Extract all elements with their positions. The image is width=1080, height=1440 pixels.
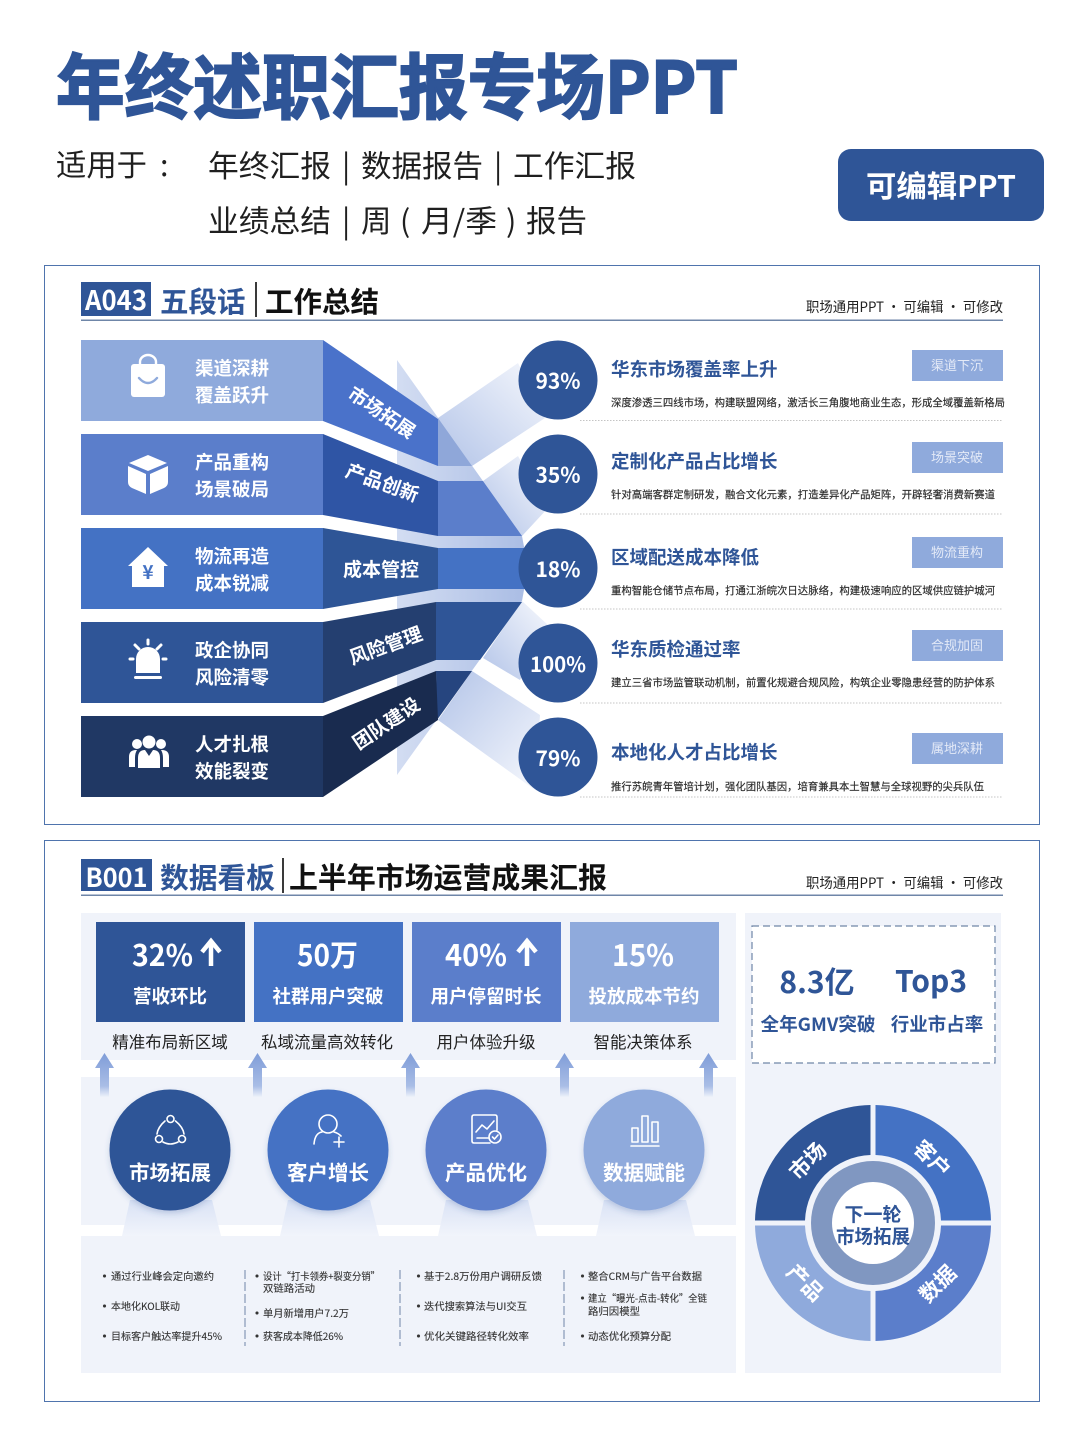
row 1: channel coverage: 市场拓展 [343, 379, 421, 444]
KPI row 2: 场景突破 [931, 447, 983, 466]
bullet list: product [417, 1268, 542, 1343]
subtitle: applicable scenarios: 年终汇报 [208, 142, 331, 186]
panel: B001 data dashboard [44, 840, 1040, 1402]
icon: bar chart [631, 1116, 659, 1146]
row 4: risk management [81, 602, 436, 703]
KPI row 1 [518, 340, 1005, 420]
subtitle: applicable scenarios: 月/季 [421, 197, 497, 241]
row 1: channel coverage: 渠道深耕 [195, 355, 269, 381]
bullet list: data: 路归因模型 [588, 1303, 640, 1318]
panel B heading [81, 855, 1003, 897]
row 2: product rebuild: 产品重构 [195, 449, 269, 475]
segment: customer [876, 1105, 991, 1220]
KPI row 3: 18% [535, 554, 581, 584]
bullet list: customer: 单月新增用户7.2万 [263, 1305, 349, 1320]
bullet list: product: 优化关键路径转化效率 [424, 1328, 529, 1343]
subtitle: applicable scenarios: 工作汇报 [513, 142, 636, 186]
background bands [81, 913, 1001, 1373]
circle: data empowerment [584, 1090, 704, 1210]
subtitle: applicable scenarios: | [494, 142, 502, 186]
metric card: community users [254, 922, 403, 1053]
segment: product: 产品 [780, 1257, 831, 1308]
row 2: product rebuild [81, 434, 438, 536]
subtitle: applicable scenarios: 报告 [526, 197, 587, 241]
icon: report with check [472, 1115, 501, 1143]
KPI row 5: 推行苏皖青年管培计划，强化团队基因，培育兼具本土智慧与全球视野的尖兵队伍 [611, 779, 984, 794]
row 2: product rebuild: 场景破局 [195, 476, 269, 502]
segment: market: 市场 [782, 1135, 833, 1186]
KPI row 5: 79% [535, 743, 581, 773]
row 5: talent: 效能裂变 [195, 758, 269, 784]
metric card: ad cost: 智能决策体系 [594, 1029, 692, 1053]
panel A heading: 五段话 [160, 280, 246, 321]
subtitle: applicable scenarios: | [342, 197, 350, 241]
bullet list: data [581, 1268, 707, 1343]
icon: house with yen: ¥ [142, 558, 154, 585]
row 3: logistics cost: 物流再造 [195, 543, 270, 569]
subtitle: applicable scenarios: 适用于 [56, 141, 147, 185]
icon: shopping bag [131, 355, 165, 397]
circle: product optimisation: 产品优化 [445, 1156, 527, 1186]
bullet list: market: 本地化KOL联动 [111, 1298, 180, 1313]
callout: annual totals: 行业市占率 [891, 1011, 983, 1037]
pedestal beams [122, 1200, 695, 1236]
callout: annual totals [752, 926, 995, 1063]
metric card: community users: 社群用户突破 [272, 983, 384, 1009]
bullet list: data: 建立“曝光-点击-转化”全链 [588, 1290, 707, 1305]
KPI row 4: 建立三省市场监管联动机制，前置化规避合规风险，构筑企业零隐患经营的防护体系 [611, 675, 995, 690]
panel B heading: 数据看板 [160, 856, 275, 897]
donut hub [811, 1161, 935, 1285]
dashed column dividers [245, 1270, 564, 1346]
subtitle: applicable scenarios: 周 [361, 197, 392, 241]
metric card: ad cost [570, 922, 719, 1053]
white separators between folds [323, 421, 397, 716]
KPI row 2: 定制化产品占比增长 [611, 448, 778, 474]
donut hub: 市场拓展 [836, 1222, 910, 1249]
KPI row 5: 本地化人才占比增长 [611, 739, 778, 765]
bullet list: market [103, 1268, 222, 1343]
subtitle: applicable scenarios [56, 141, 636, 241]
circle: customer growth [268, 1090, 388, 1210]
icon: alarm light [130, 640, 166, 679]
row 1: channel coverage [81, 340, 438, 466]
panel A heading: 工作总结 [265, 280, 379, 321]
subtitle: applicable scenarios: | [342, 142, 350, 186]
KPI row 4: 合规加固 [931, 635, 983, 654]
segment: product [755, 1226, 870, 1341]
icon: share loop [156, 1116, 186, 1144]
panel B heading: 职场通用PPT · 可编辑 · 可修改 [806, 873, 1003, 893]
subtitle: applicable scenarios: : [160, 141, 168, 185]
KPI row 3 [518, 528, 1003, 609]
funnel graphic [81, 340, 548, 797]
KPI row 4: 100% [530, 649, 586, 679]
metric card: dwell time: 用户体验升级 [436, 1029, 536, 1053]
metric card: revenue: 精准布局新区域 [112, 1029, 228, 1053]
callout: annual totals: Top3 [895, 957, 967, 1001]
subtitle: applicable scenarios: 业绩总结 [208, 197, 331, 241]
panel A heading [81, 279, 1003, 321]
metric card: revenue: 营收环比 [133, 983, 207, 1009]
icon: house with yen [128, 547, 168, 587]
bullet list: data: 整合CRM与广告平台数据 [588, 1268, 702, 1283]
KPI row 5: 属地深耕 [931, 738, 983, 757]
metric card: dwell time: 用户停留时长 [430, 983, 542, 1009]
bullet list: market: 通过行业峰会定向邀约 [111, 1268, 214, 1283]
KPI row 5 [518, 718, 1003, 797]
callout: annual totals: 8.3亿 [779, 958, 855, 1002]
bullet list: customer: 获客成本降低26% [263, 1328, 343, 1343]
title: 年终述职汇报专场PPT [56, 32, 738, 134]
row 5: talent [81, 671, 438, 797]
icon: add user [314, 1115, 344, 1147]
metric card: community users: 50万 [297, 931, 358, 975]
KPI row 4 [518, 624, 1003, 703]
circle: market expansion: 市场拓展 [129, 1156, 211, 1186]
circle: market expansion [110, 1090, 230, 1210]
bullet list: market: 目标客户触达率提升45% [111, 1328, 222, 1343]
badge: editable PPT [838, 149, 1044, 221]
subtitle: applicable scenarios: 数据报告 [361, 142, 483, 186]
row 5: talent: 人才扎根 [195, 731, 270, 757]
bullet list: product: 迭代搜索算法与UI交互 [424, 1298, 527, 1313]
circle: data empowerment: 数据赋能 [603, 1156, 685, 1186]
segment: data [876, 1226, 991, 1341]
funnel channel extensions [436, 418, 528, 720]
row 5: talent: 团队建设 [347, 690, 425, 755]
KPI row 2: 针对高端客群定制研发，融合文化元素，打造差异化产品矩阵，开辟轻奢消费新赛道 [611, 487, 995, 502]
KPI row 1: 华东市场覆盖率上升 [611, 356, 778, 382]
donut chart [755, 1105, 991, 1341]
row 3: logistics cost: 成本锐减 [195, 570, 270, 596]
panel B heading: 上半年市场运营成果汇报 [289, 855, 607, 897]
KPI row 3: 区域配送成本降低 [611, 544, 760, 570]
panel B heading: B001 [86, 858, 148, 895]
metric card: revenue [96, 922, 245, 1053]
subtitle: applicable scenarios: ( [400, 197, 410, 241]
metric card: ad cost: 15% [612, 931, 674, 975]
KPI row 1: 渠道下沉 [931, 355, 983, 374]
KPI row 2: 35% [535, 460, 581, 490]
KPI row 1: 深度渗透三四线市场，构建联盟网络，激活长三角腹地商业生态，形成全域覆盖新格局 [611, 395, 1005, 410]
row 4: risk management: 政企协同 [195, 637, 269, 663]
segment: market [755, 1105, 870, 1220]
upward arrows [95, 1053, 718, 1097]
callout: annual totals: 全年GMV突破 [760, 1011, 876, 1037]
row 4: risk management: 风险清零 [195, 664, 270, 690]
icon: cube [128, 455, 168, 494]
metric card: dwell time: 40% [445, 931, 507, 975]
KPI row 3: 物流重构 [931, 542, 983, 561]
donut hub: 下一轮 [844, 1200, 902, 1227]
row 1: channel coverage: 覆盖跃升 [195, 382, 269, 408]
funnel backdrop triangle [397, 360, 528, 775]
panel: A043 work summary [44, 266, 1040, 824]
KPI row 1: 93% [535, 366, 581, 396]
panel A heading: 职场通用PPT · 可编辑 · 可修改 [806, 297, 1003, 317]
circle: customer growth: 客户增长 [287, 1156, 369, 1186]
KPI row 2 [518, 434, 1003, 514]
panel A heading: A043 [84, 279, 147, 318]
bullet list: customer: 设计“打卡领券+裂变分销” [263, 1268, 380, 1283]
KPI row 4: 华东质检通过率 [611, 636, 741, 662]
badge: editable PPT: 可编辑PPT [866, 162, 1016, 206]
KPI row 3: 重构智能仓储节点布局，打通江浙皖次日达脉络，构建极速响应的区域供应链护城河 [611, 583, 995, 598]
row 4: risk management: 风险管理 [345, 619, 426, 671]
bullet list: data: 动态优化预算分配 [588, 1328, 671, 1343]
metric card: revenue: 32% [132, 931, 193, 975]
light beams to circles [438, 363, 548, 790]
circle: product optimisation [426, 1090, 546, 1210]
row 3: logistics cost [81, 528, 438, 609]
subtitle: applicable scenarios: ) [506, 197, 516, 241]
bullet list: customer [256, 1268, 380, 1343]
metric card: ad cost: 投放成本节约 [588, 983, 700, 1009]
icon: team [129, 736, 169, 768]
row 3: logistics cost: 成本管控 [343, 555, 419, 582]
segment: customer: 客户 [907, 1133, 958, 1184]
bullet list: customer: 双链路活动 [263, 1280, 315, 1295]
metric card: community users: 私域流量高效转化 [261, 1029, 393, 1053]
bullet list: product: 基于2.8万份用户调研反馈 [424, 1268, 542, 1283]
segment: data: 数据 [912, 1258, 963, 1309]
metric card: dwell time [412, 922, 561, 1053]
row 2: product rebuild: 产品创新 [342, 456, 423, 508]
